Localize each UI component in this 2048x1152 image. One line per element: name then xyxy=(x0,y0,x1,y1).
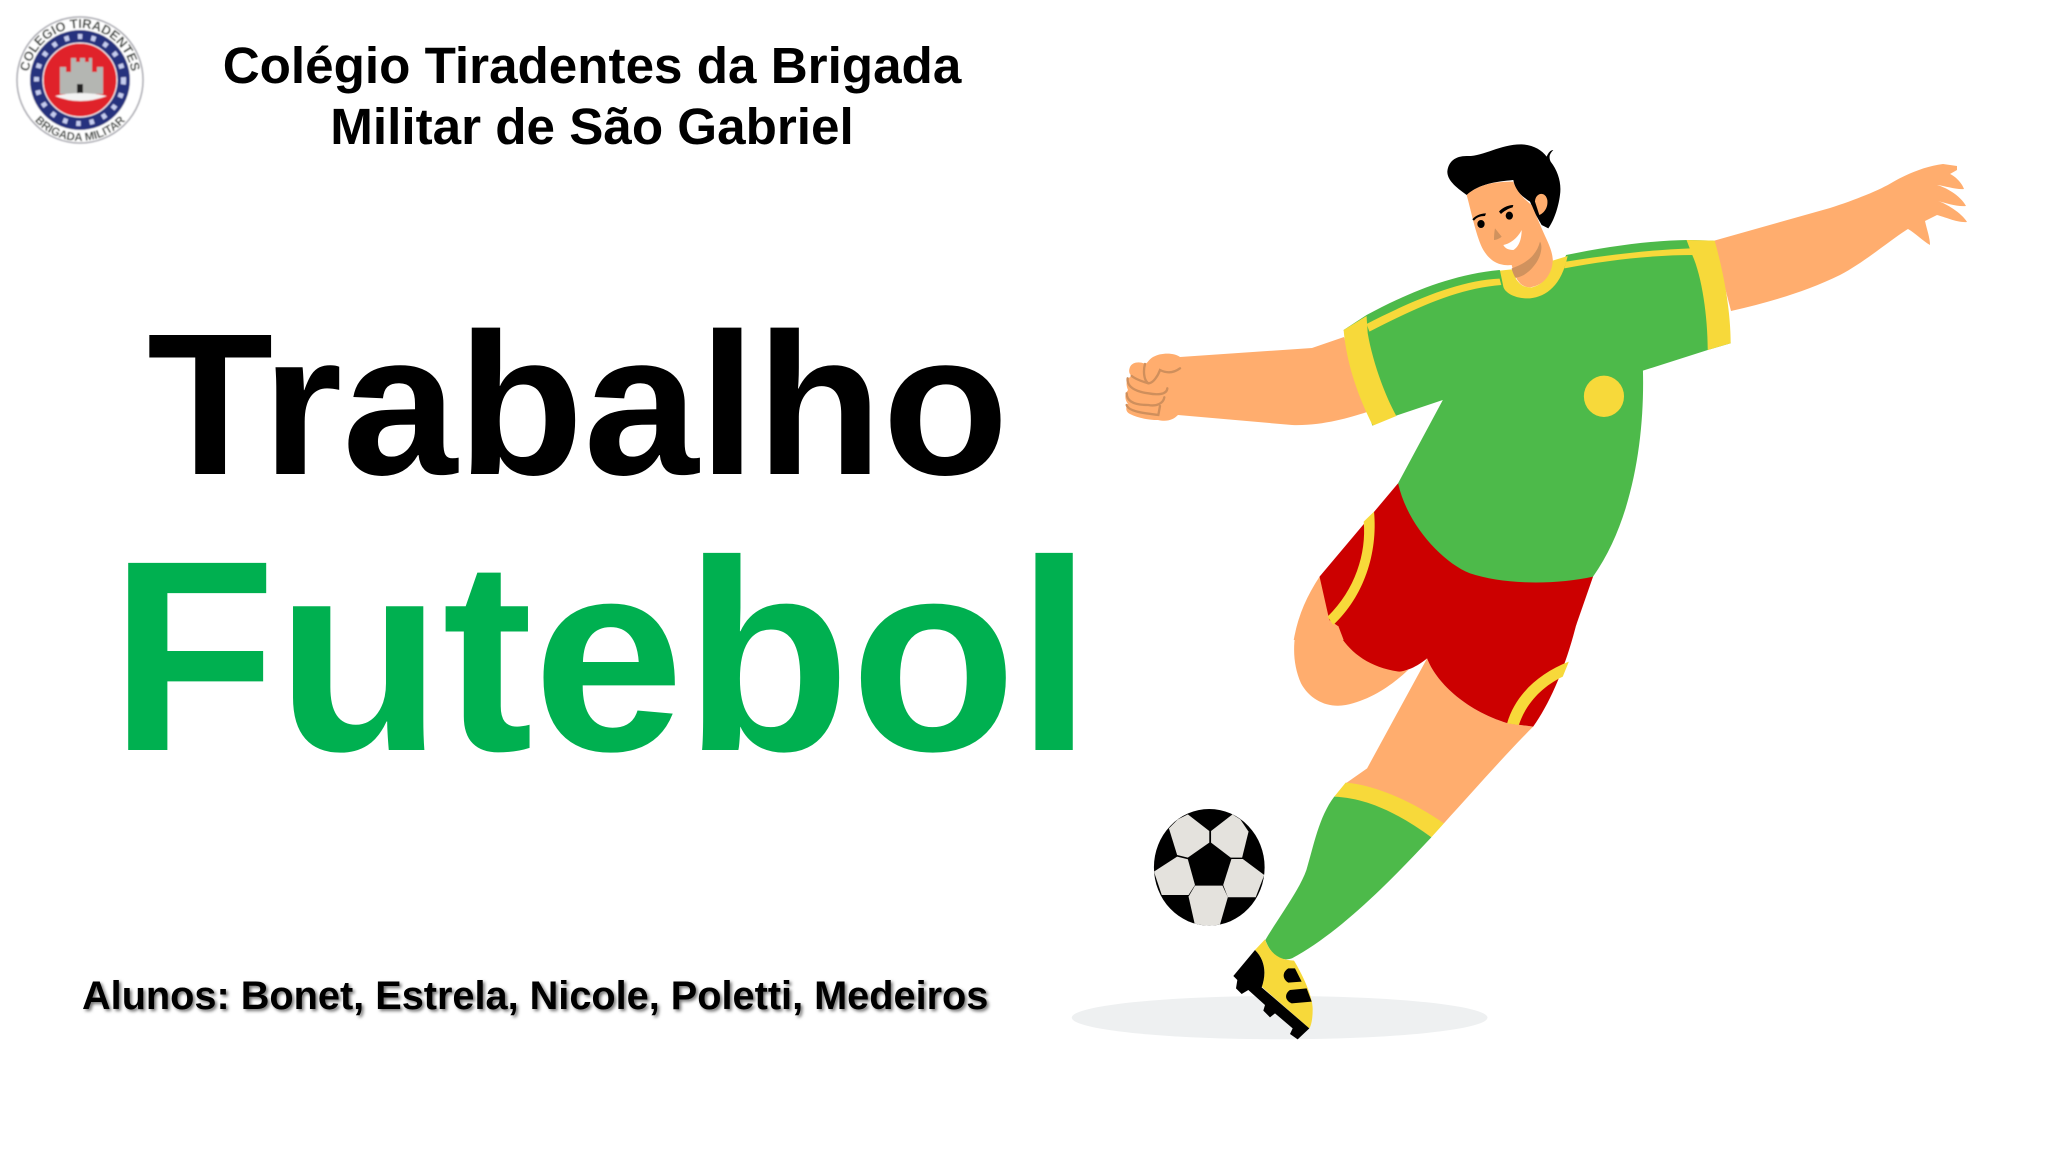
player head xyxy=(1447,144,1568,298)
illustration: soccer ball xyxy=(1154,809,1265,928)
smile xyxy=(1503,230,1522,250)
collar xyxy=(1500,256,1568,298)
raised thigh xyxy=(1294,618,1408,706)
crest blue star ring xyxy=(30,30,130,130)
hair xyxy=(1447,144,1560,228)
school name heading: Militar de São Gabriel xyxy=(330,98,854,155)
right sleeve cuff xyxy=(1687,240,1731,350)
school name heading: Colégio Tiradentes da Brigada xyxy=(223,37,961,94)
illustration: ground shadow xyxy=(1072,996,1487,1039)
neck shadow xyxy=(1512,242,1541,278)
thigh upper skin xyxy=(1294,577,1344,640)
player front arm and fist xyxy=(1125,337,1367,425)
shorts lower xyxy=(1331,618,1578,727)
fist finger lines xyxy=(1127,364,1180,415)
boot stripes xyxy=(1284,968,1312,1003)
title: Trabalho: Trabalho xyxy=(147,291,1009,517)
left sleeve cuff xyxy=(1344,316,1396,426)
crest castle base xyxy=(55,93,107,101)
crest star dots xyxy=(36,36,124,124)
school name heading xyxy=(223,37,962,155)
title: Futebol: Futebol xyxy=(110,504,1092,808)
illustration: football player xyxy=(1125,144,1967,1039)
shorts upper xyxy=(1320,483,1593,626)
boot upper xyxy=(1255,939,1313,1028)
boot sole xyxy=(1233,950,1309,1039)
standing leg xyxy=(1346,658,1533,823)
crest castle door xyxy=(77,84,83,95)
sock band xyxy=(1334,783,1444,837)
eyebrows xyxy=(1472,205,1513,221)
player legs xyxy=(1265,618,1578,959)
eyes xyxy=(1477,212,1513,228)
green sock xyxy=(1265,797,1431,959)
chest badge xyxy=(1584,376,1624,417)
crest red disc xyxy=(43,43,117,117)
player torso xyxy=(1294,240,1731,640)
shorts right stripe xyxy=(1507,662,1569,725)
shorts left stripe xyxy=(1328,512,1375,625)
crest bottom text: BRIGADA MILITAR xyxy=(34,115,126,142)
crest castle xyxy=(60,58,103,94)
students line: Alunos: Bonet, Estrela, Nicole, Poletti, Medeiros xyxy=(82,974,988,1018)
ear xyxy=(1535,194,1547,215)
player boot xyxy=(1233,939,1313,1039)
icon: school crest logo xyxy=(16,16,144,144)
nose xyxy=(1494,228,1502,240)
shoulder stripes xyxy=(1367,248,1693,332)
face and neck xyxy=(1467,182,1553,287)
crest top text: COLEGIO TIRADENTES xyxy=(20,18,140,72)
green shirt xyxy=(1344,240,1731,583)
player raised arm and hand xyxy=(1713,164,1967,311)
